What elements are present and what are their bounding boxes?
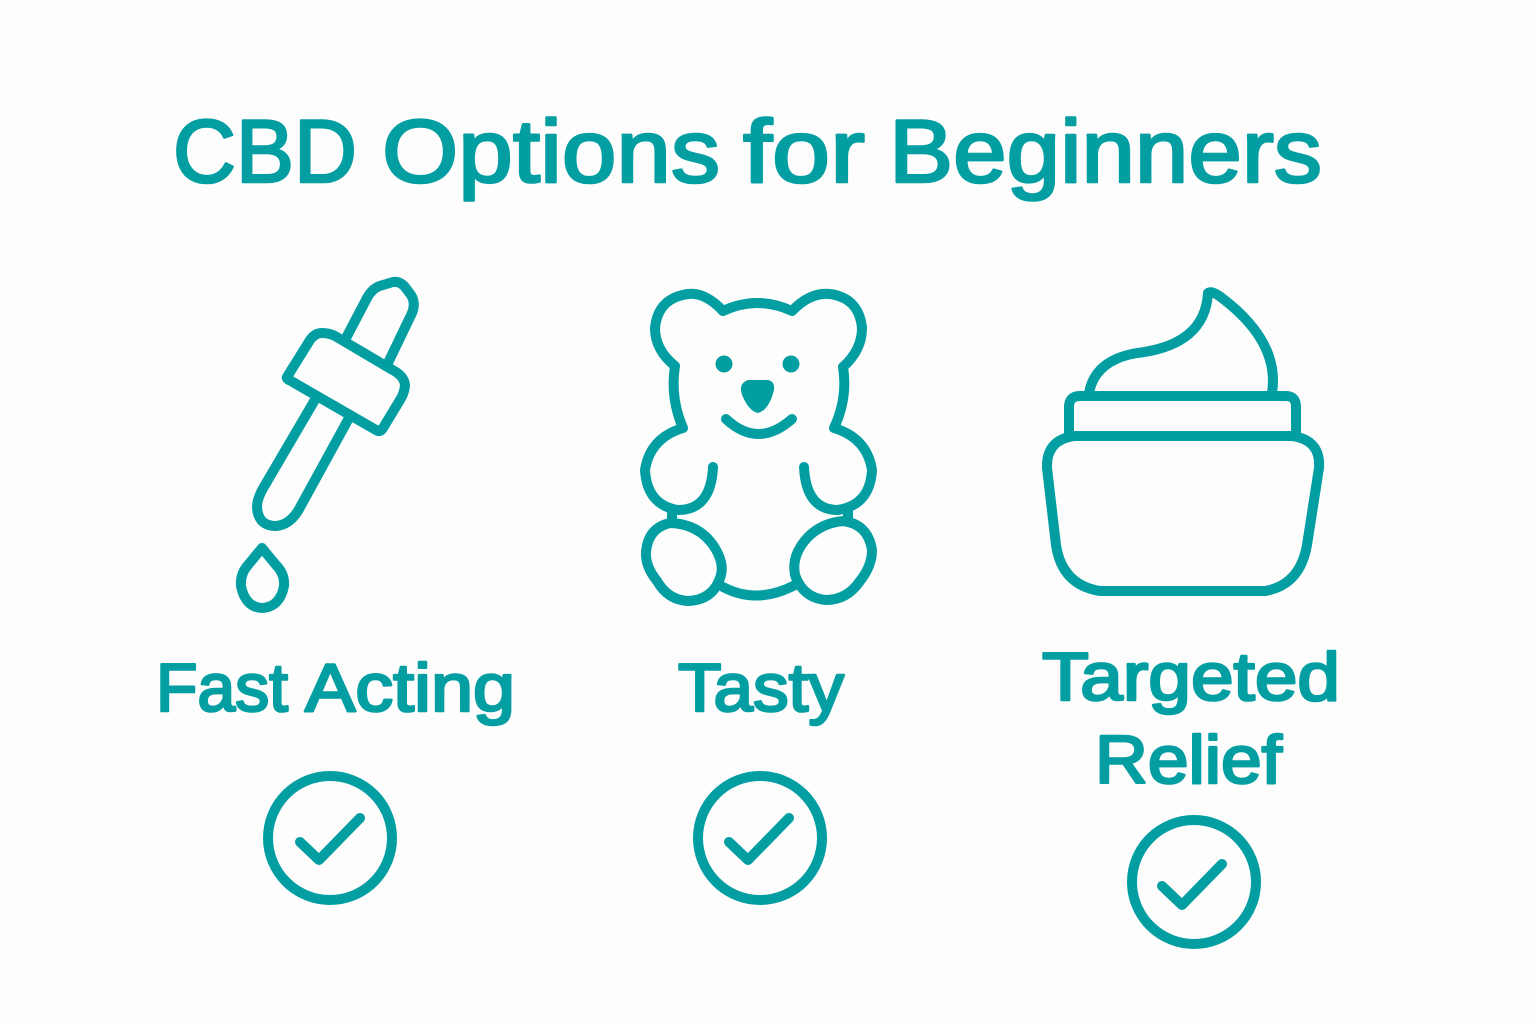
icon: dropper bbox=[241, 282, 414, 608]
label: Fast Acting: Fast bbox=[156, 650, 288, 726]
label: Targeted Relief: Targeted bbox=[1042, 639, 1340, 715]
title: Options bbox=[382, 101, 720, 201]
title: CBD bbox=[173, 101, 357, 201]
label: Tasty: Tasty bbox=[678, 650, 844, 726]
title: Beginners bbox=[889, 101, 1322, 201]
icon: cream jar bbox=[1047, 292, 1319, 591]
title: for bbox=[743, 101, 865, 201]
icon: check 2 bbox=[698, 776, 822, 900]
icon: check 1 bbox=[268, 776, 392, 900]
label: Fast Acting: Acting bbox=[305, 650, 515, 726]
label: Targeted Relief: Relief bbox=[1095, 722, 1282, 798]
icon: gummy bear bbox=[645, 294, 872, 601]
icon: check 3 bbox=[1132, 820, 1256, 944]
